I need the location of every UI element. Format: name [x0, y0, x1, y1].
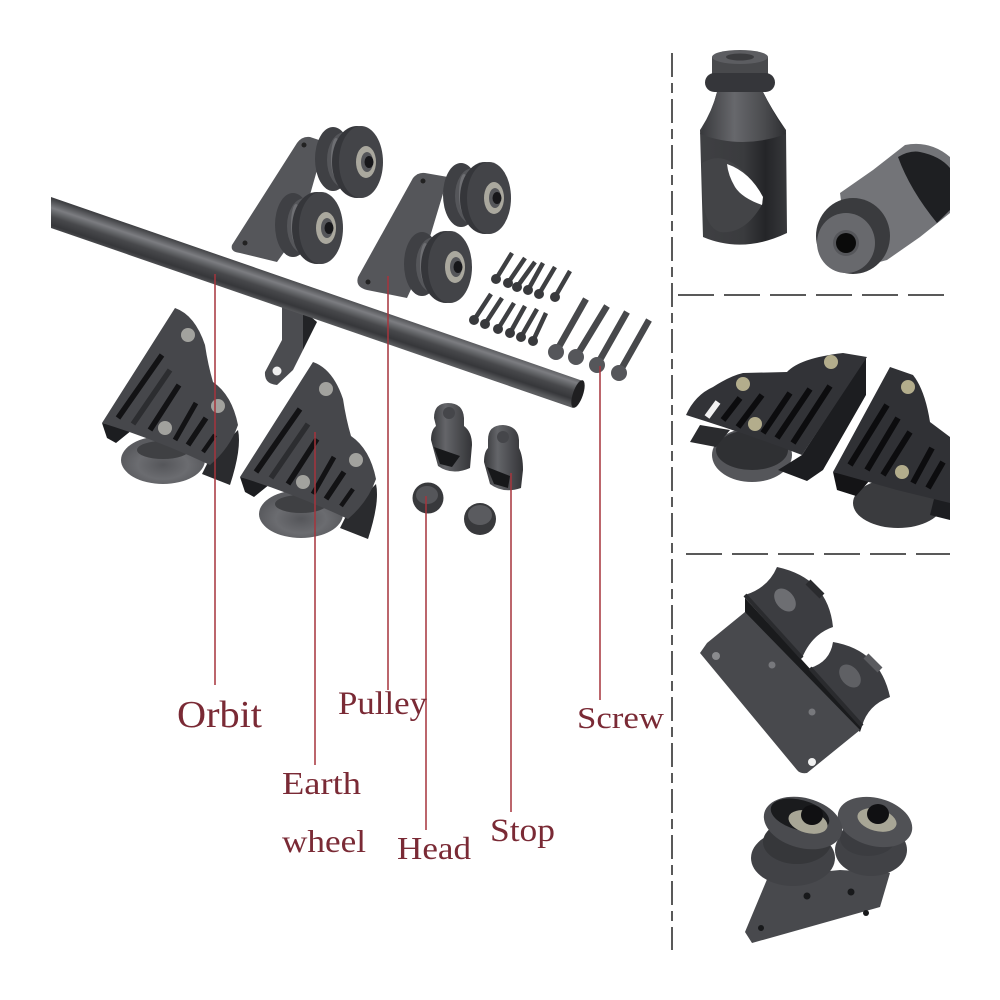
product: large screws	[548, 299, 649, 381]
product: small screws	[469, 253, 570, 346]
label: Head: Head	[397, 830, 471, 866]
label: Orbit: Orbit	[177, 694, 262, 736]
label: Pulley: Pulley	[338, 686, 428, 722]
product: pulley assembly back	[232, 126, 383, 264]
product: orbit rail and bracket	[51, 197, 587, 409]
label: Earth wheel: Earth	[282, 765, 361, 801]
dashed dividers	[672, 53, 950, 950]
leader lines	[215, 274, 600, 830]
label: Stop: Stop	[490, 813, 555, 849]
product: pulley assembly front	[357, 162, 511, 303]
product: earth wheel right	[240, 362, 377, 539]
product: stops	[431, 403, 523, 490]
detail: pulley plate lower	[745, 788, 918, 943]
detail: pulley plate upper	[700, 567, 890, 773]
label: Screw: Screw	[577, 700, 665, 735]
detail: stop close-up lying	[816, 144, 950, 274]
product: earth wheel left	[102, 308, 239, 485]
label: Earth wheel: wheel	[282, 823, 366, 859]
product: heads	[412, 482, 496, 535]
detail: stop close-up upright	[700, 50, 787, 245]
detail: wheel boxes	[686, 353, 950, 528]
